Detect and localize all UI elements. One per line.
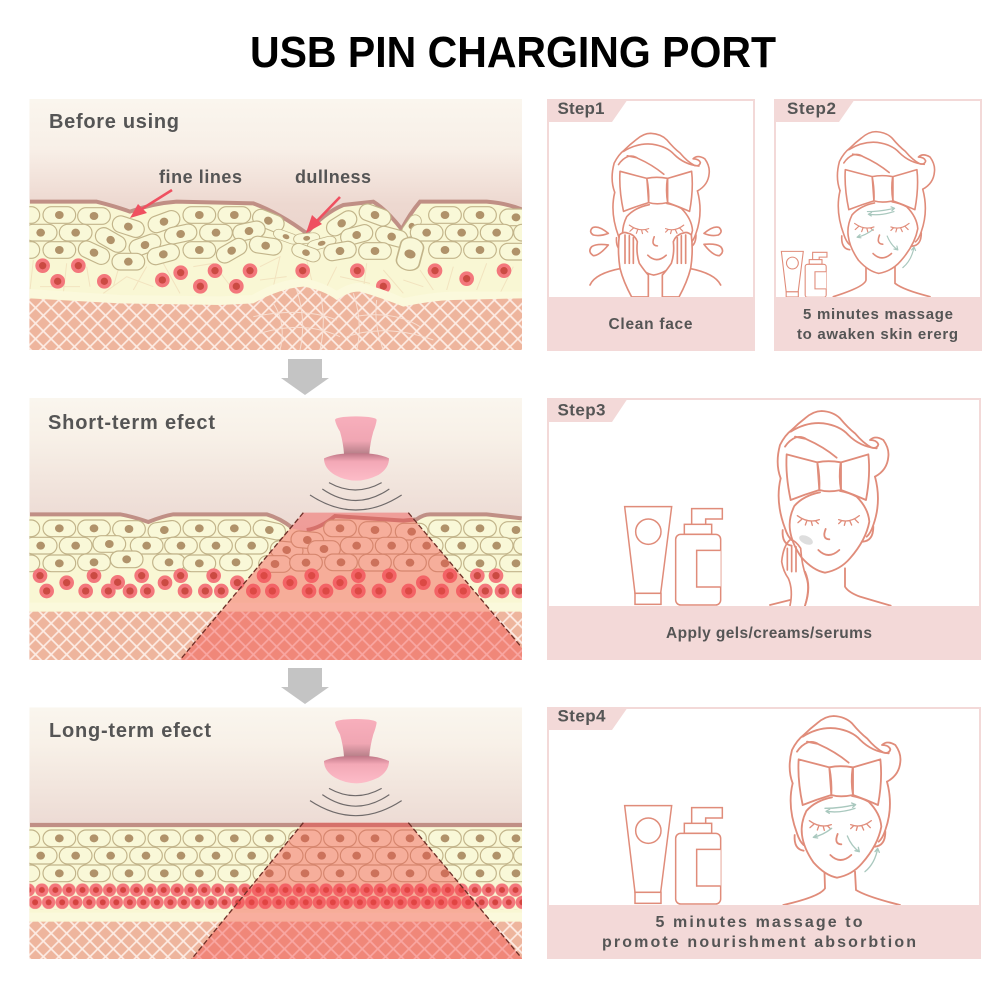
illustration: massage face [833,132,935,297]
arrow: fine lines [130,190,172,218]
panel: long-term effect [7,707,546,959]
arrow: down 2 [281,668,329,704]
step label: Step1 [558,99,604,118]
collagen mesh [29,287,522,350]
frame [548,708,980,958]
dermis band [29,595,522,619]
arrow: down 1 [281,359,329,395]
arrow: dullness [306,197,340,233]
panel: step 1 [547,99,755,351]
panel background [30,99,522,230]
step tab [774,99,855,122]
caption: promote nourishment absorbtion [602,934,916,951]
caption: Apply gels/creams/serums [666,625,872,642]
panel background [30,708,522,827]
label: fine lines: fine lines [159,167,242,187]
caption: to awaken skin ererg [797,326,958,343]
illustration: applying cream [625,411,891,606]
dermis band [29,905,522,929]
label: before using: Before using [49,111,179,133]
caption: Clean face [608,316,693,333]
step label: Step2 [787,99,836,118]
skin cells [7,830,546,882]
panel: before using [7,99,546,350]
device: massager [324,416,389,481]
skin cells [7,202,546,273]
dermis band [30,280,502,294]
red blood cells [33,568,526,598]
step label: Step3 [558,400,606,420]
illustration: products [781,251,827,297]
label: short-term effect: Short-term efect [48,412,215,434]
frame [548,100,754,350]
panel: short-term effect [7,398,546,660]
caption bar [774,297,982,351]
caption: 5 minutes massage to [656,914,863,931]
warped collagen fibres [253,290,433,350]
frame [548,399,980,659]
skin surface line [30,514,522,530]
beam edges [192,823,521,959]
title: USB PIN CHARGING PORT [250,28,776,77]
caption bar [547,297,755,351]
basal tissue lines [30,257,513,293]
caption: 5 minutes massage [803,306,953,323]
panel: step 2 [774,99,982,351]
skin surface line [30,822,522,828]
caption [797,306,958,343]
beam edges [180,513,521,660]
caption bar [547,905,981,959]
red blood cells [35,258,511,294]
step label: Step4 [558,706,606,726]
label: dullness: dullness [295,167,371,187]
panel background [30,398,522,531]
vibration waves [310,788,402,816]
red blood cell rows [29,883,522,909]
vibration waves [310,483,402,510]
light beam [192,823,522,959]
caption [602,914,916,951]
collagen mesh [29,922,522,959]
step tab [547,707,628,730]
step tab [547,99,628,122]
skin cells [7,518,546,572]
device: massager [324,719,389,783]
frame [775,100,981,350]
panel: step 3 [547,398,981,660]
illustration: massage and products [625,716,900,905]
epidermis layer [29,203,522,310]
panel: step 4 [547,706,981,959]
skin surface line [30,202,522,233]
epidermis layer [29,516,522,613]
illustration: washing face [590,133,723,297]
label: long-term effect: Long-term efect [49,720,211,742]
caption bar [547,606,981,660]
epidermis layer [29,827,522,923]
step tab [547,398,628,422]
collagen mesh [29,612,522,660]
light beam [180,513,522,660]
